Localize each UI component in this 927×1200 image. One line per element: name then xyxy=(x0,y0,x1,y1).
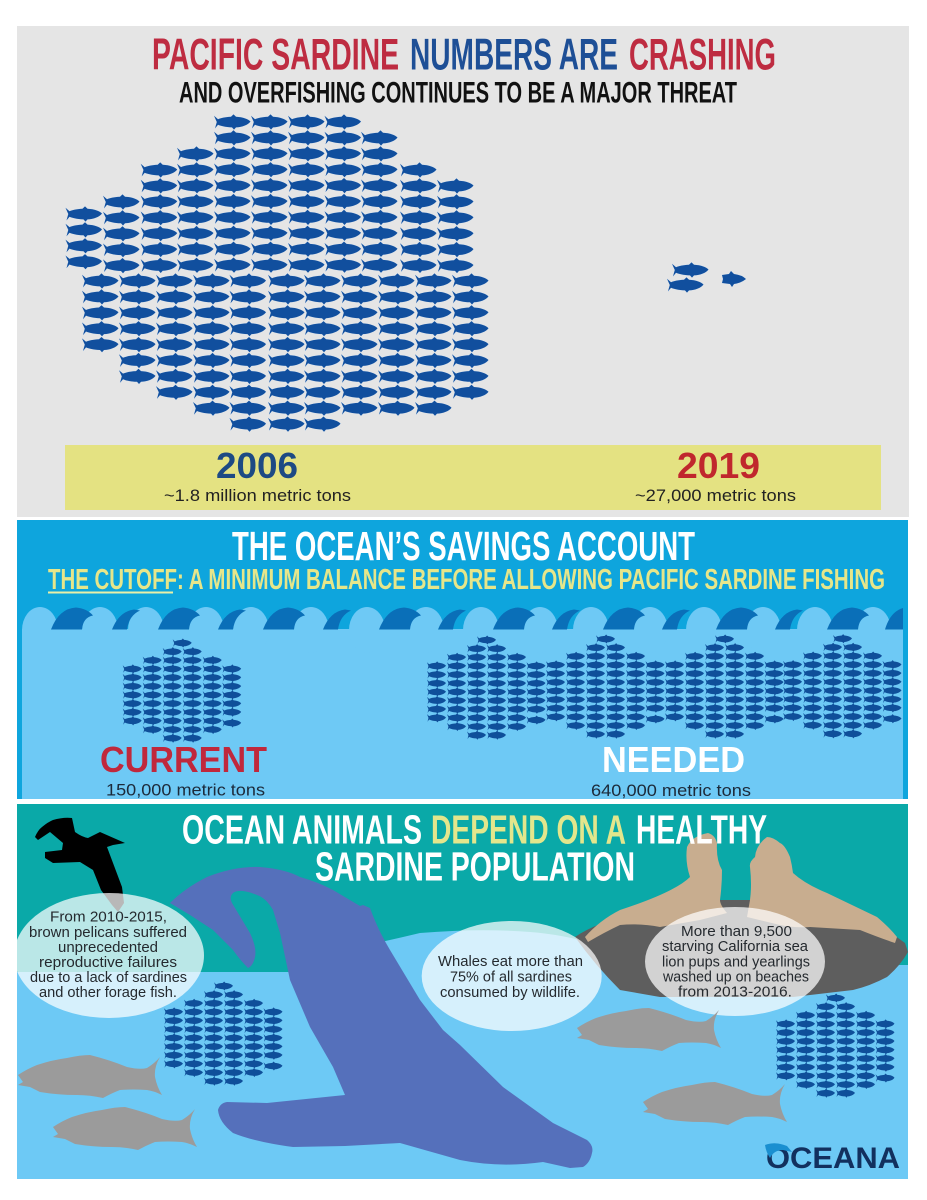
callout: pelicans: unprecedented xyxy=(58,940,158,956)
title: NUMBERS ARE xyxy=(410,30,618,80)
heading: OCEAN ANIMALS xyxy=(182,806,422,852)
waves xyxy=(22,607,903,653)
2019 label: 2019 xyxy=(677,445,760,486)
callout: pelicans: due to a lack of sardines xyxy=(30,970,187,986)
icon: whale tail xyxy=(170,867,592,1168)
needed label xyxy=(591,739,751,800)
fish school: left xyxy=(164,981,282,1086)
heading: DEPEND ON A xyxy=(431,806,626,852)
needed label: NEEDED xyxy=(602,739,745,780)
callout: sea lions: washed up on beaches xyxy=(662,970,809,986)
2006 label: ~1.8 million metric tons xyxy=(164,486,351,505)
callout: sea lions: from 2013-2016. xyxy=(678,984,792,1000)
heading: HEALTHY xyxy=(636,806,767,852)
year strip xyxy=(65,445,881,510)
callout: whales: consumed by wildlife. xyxy=(440,985,580,1001)
needed label: 640,000 metric tons xyxy=(591,781,751,800)
gray fish xyxy=(18,1008,787,1150)
2019 label: ~27,000 metric tons xyxy=(635,486,796,505)
water xyxy=(17,930,908,1179)
logo: Oceana: OCEANA xyxy=(766,1142,900,1175)
icon: sea lions xyxy=(585,833,897,943)
panel: savings account xyxy=(17,520,908,800)
fish school: needed xyxy=(427,634,901,740)
title: CRASHING xyxy=(629,30,776,80)
callout: sea lions: lion pups and yearlings xyxy=(662,954,810,970)
callout: whales: Whales eat more than xyxy=(438,954,583,970)
water xyxy=(22,629,903,799)
heading xyxy=(183,815,767,881)
fish school: 2019 xyxy=(667,262,746,293)
heading: THE OCEAN’S SAVINGS ACCOUNT xyxy=(232,523,695,569)
callout: sea lions xyxy=(645,907,825,1016)
callout: pelicans: and other forage fish. xyxy=(39,985,177,1001)
callout: pelicans: From 2010-2015, xyxy=(50,910,167,926)
heading: SARDINE POPULATION xyxy=(315,844,635,890)
title xyxy=(152,30,776,80)
callout: sea lions: More than 9,500 xyxy=(681,924,792,940)
callout: pelicans xyxy=(14,893,204,1018)
title: PACIFIC SARDINE xyxy=(152,30,399,80)
callout: whales: 75% of all sardines xyxy=(450,970,572,986)
2006 label xyxy=(164,445,351,505)
current label xyxy=(100,739,267,800)
current label: CURRENT xyxy=(100,739,267,780)
icon: pelican xyxy=(35,818,125,912)
fish school: current xyxy=(123,638,241,743)
callout: whales xyxy=(422,921,602,1031)
fish school: 2006 xyxy=(66,114,488,432)
2006 label: 2006 xyxy=(216,445,298,486)
rock xyxy=(575,900,908,997)
panel: sardine numbers xyxy=(17,26,909,517)
fish school: right xyxy=(776,993,894,1098)
callout: pelicans: brown pelicans suffered xyxy=(29,925,187,941)
current label: 150,000 metric tons xyxy=(106,780,265,800)
callout: sea lions: starving California sea xyxy=(662,939,809,955)
panel: ocean animals xyxy=(14,804,908,1179)
callout: pelicans: reproductive failures xyxy=(39,955,177,971)
2019 label xyxy=(635,445,796,505)
